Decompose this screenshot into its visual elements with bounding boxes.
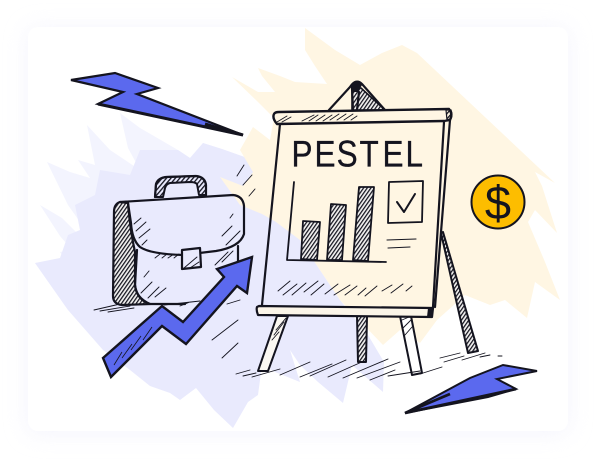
chart axes (287, 182, 386, 262)
bar 1 (301, 221, 320, 260)
dollar coin: $ (485, 176, 511, 229)
title text: PESTEL (292, 134, 423, 175)
side panel hatched (113, 202, 150, 305)
bottom bar (257, 306, 433, 317)
bolt bottom right (405, 365, 537, 413)
checkbox (388, 181, 423, 223)
yellow brush stroke (220, 28, 560, 345)
easel back leg (441, 232, 478, 353)
handle (155, 176, 206, 197)
leg shading (272, 317, 412, 340)
bolt top left (71, 73, 243, 135)
bar chart (287, 182, 386, 262)
text lines (387, 239, 416, 248)
hanger triangle (329, 82, 385, 110)
top roller (273, 109, 451, 124)
easel middle leg (357, 316, 367, 362)
briefcase hatching (94, 214, 240, 358)
floor hatching (236, 353, 502, 380)
easel right leg (400, 316, 422, 375)
roller end (446, 110, 452, 120)
board hatching (278, 281, 412, 296)
motion marks near briefcase (237, 165, 255, 196)
bar 2 (327, 204, 346, 260)
roller shading (277, 114, 357, 122)
growth arrow (103, 257, 252, 377)
flap (120, 195, 244, 255)
faint brush streaks (35, 113, 300, 310)
card background (26, 27, 570, 435)
body (135, 246, 238, 304)
board second right edge (435, 120, 450, 307)
easel left leg (258, 316, 288, 371)
bottom bar end (427, 308, 434, 317)
bar 3 (353, 187, 374, 261)
briefcase (94, 176, 244, 358)
clasp (182, 248, 201, 269)
flipchart (257, 109, 452, 317)
dollar coin (472, 176, 524, 229)
board outline (262, 122, 444, 307)
blue brush stroke (35, 113, 384, 428)
brush body (35, 143, 384, 428)
